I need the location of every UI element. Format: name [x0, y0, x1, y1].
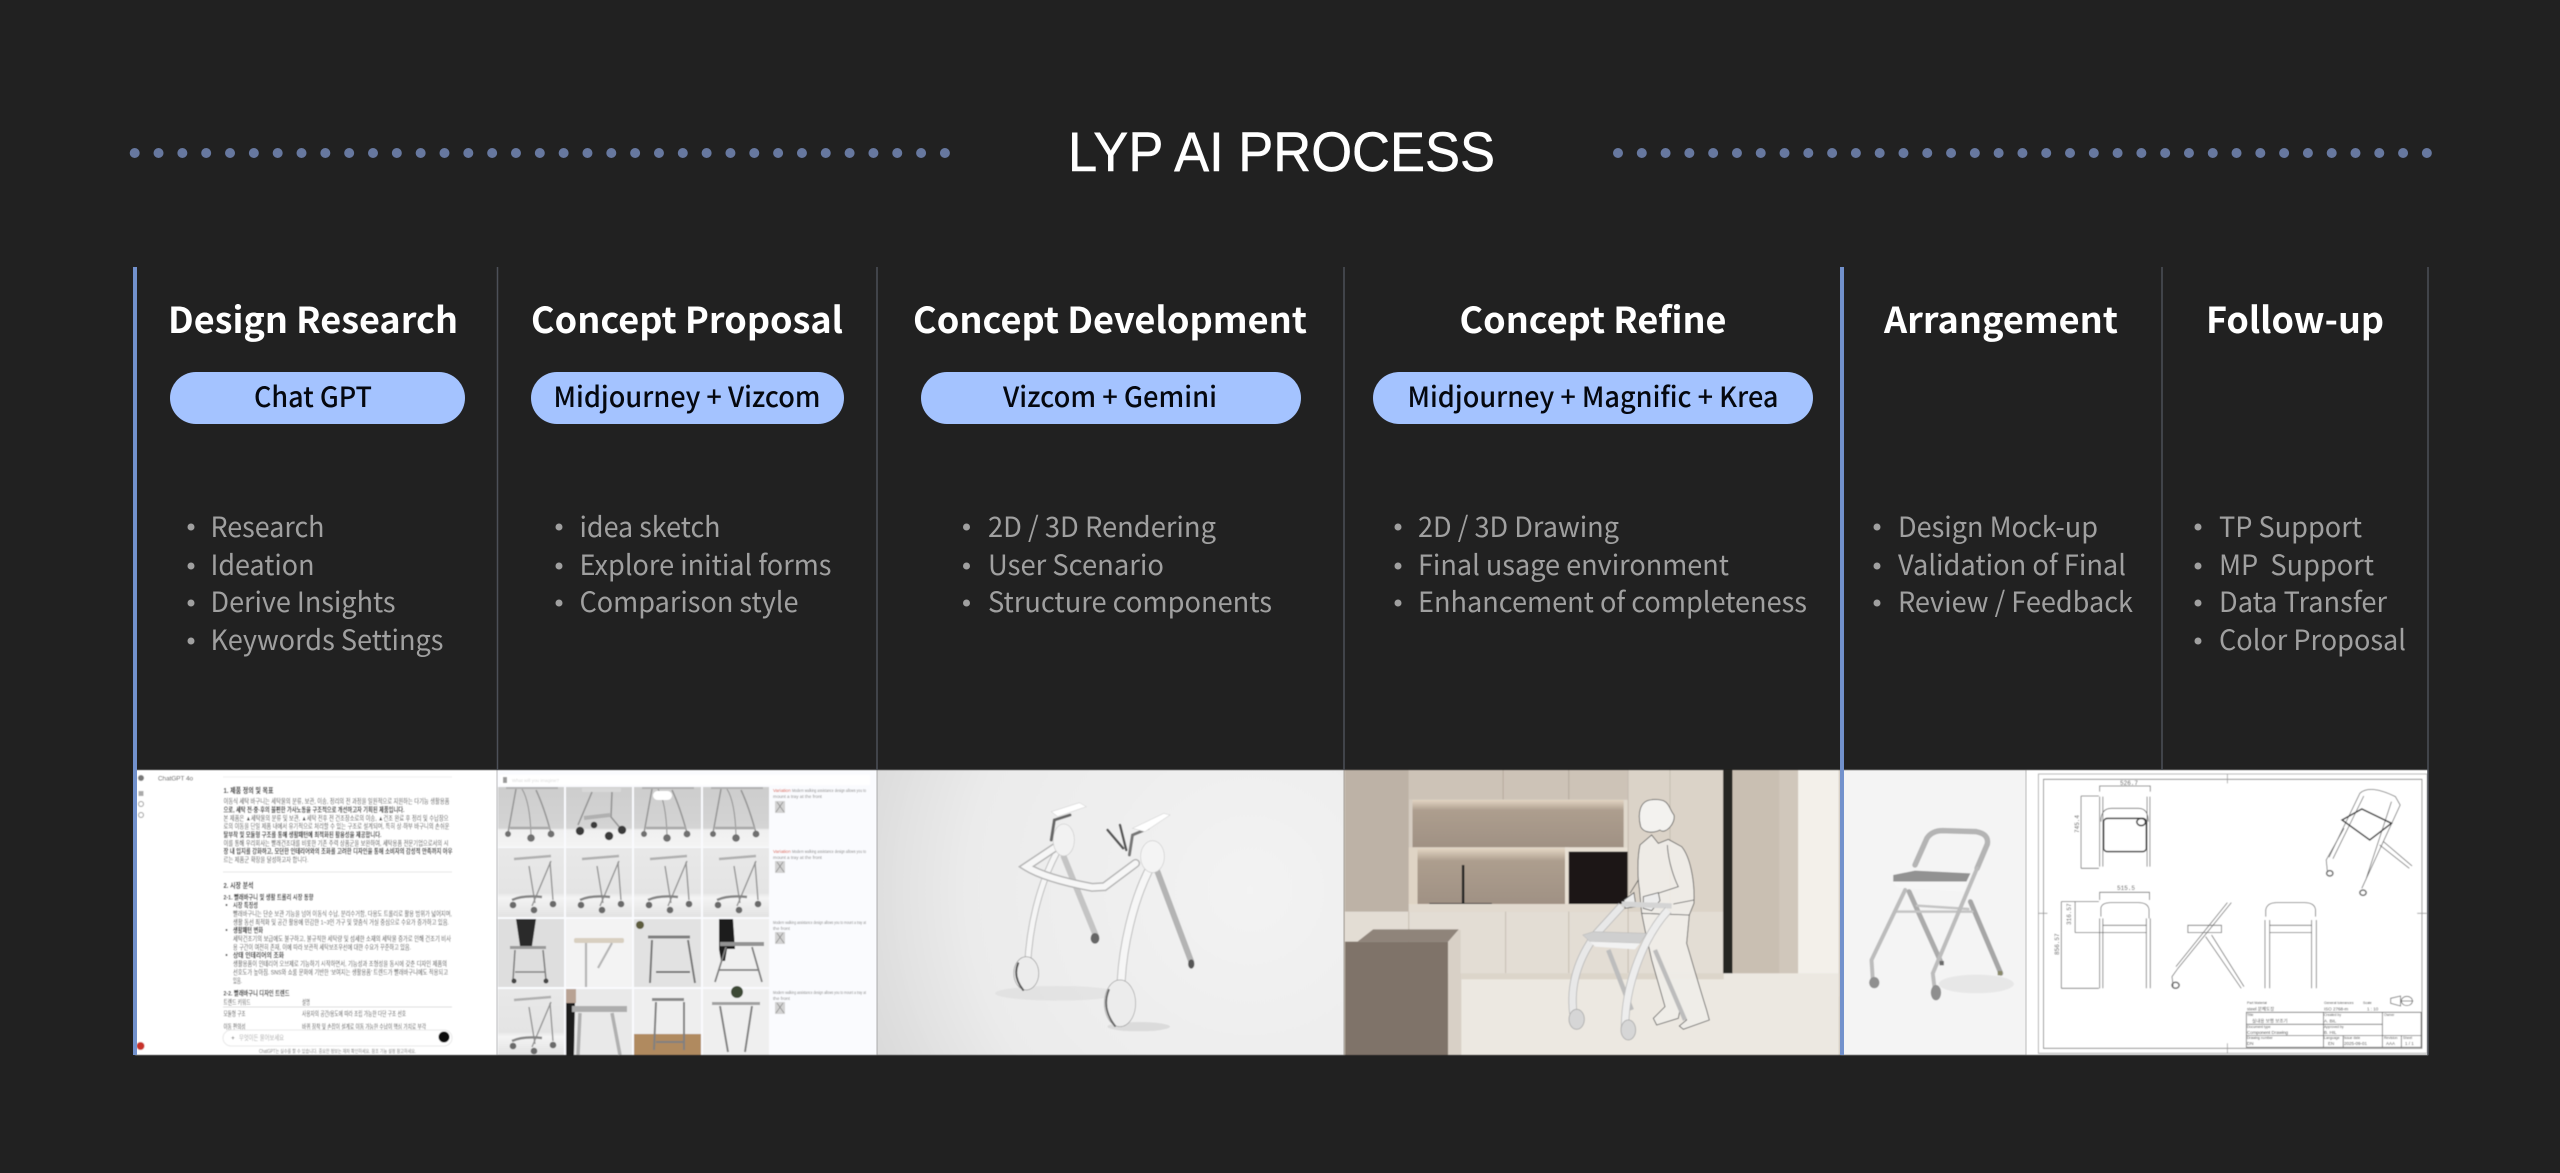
heading: Arrangement — [1883, 292, 2118, 344]
heading: Concept Development — [913, 292, 1307, 344]
panel: design research screenshot: ChatGPT는 실수를 할 수 있습니다. 중요한 정보는 재차 확인하세요. 참조 기능 설정 참고하세요. — [259, 1048, 416, 1055]
bullet list: 2D / 3D Drawing — [1418, 506, 1619, 546]
column: concept development — [913, 292, 1307, 621]
panel: design research screenshot: 있음. — [233, 977, 242, 985]
tool pill — [531, 372, 844, 424]
bullet list: Structure components — [988, 581, 1272, 621]
panel: design research screenshot: 으로, 세탁 전·중·후의 불편한 가사노동을 구조적으로 개선하고자 기획된 제품입니다. — [224, 805, 405, 814]
panel: follow-up technical drawing: Document type — [2247, 1025, 2271, 1029]
bullet list: MP Support — [2219, 544, 2374, 584]
bullet list — [963, 506, 1272, 621]
panel: design research screenshot: 생활용품이 인테리어 오브제로 기능하기 시작하면서, 기능성과 조형성을 동시에 갖춘 디자인 제품의 — [233, 959, 447, 968]
panel: design research screenshot: ChatGPT 4o — [158, 776, 193, 782]
bullet list: Explore initial forms — [580, 544, 832, 584]
panel: follow-up technical drawing: Scale — [2363, 1001, 2372, 1005]
panel: design research screenshot: 로의 이동을 단일 제품 내에서 유기적으로 처리할 수 있는 구조로 설계되며, 특히 상·하부 바구니의 손쉬운 — [224, 822, 450, 830]
column: concept proposal — [531, 292, 844, 621]
bullet list: TP Support — [2219, 506, 2362, 546]
panel: design research screenshot: 설명 — [302, 998, 310, 1006]
bullet list: Design Mock-up — [1898, 506, 2098, 546]
bullet list — [1394, 506, 1807, 621]
bullet list: Ideation — [210, 544, 314, 584]
panel: design research screenshot: 1. 제품 정의 및 목표 — [224, 785, 274, 795]
panel: follow-up technical drawing: Sheet — [2403, 1036, 2412, 1040]
bullet list: Validation of Final — [1898, 544, 2126, 584]
panel: concept proposal image grid — [497, 770, 877, 1055]
panel: follow-up technical drawing — [2026, 770, 2428, 1055]
panel: concept proposal image grid: Modern walking assistance design allows you to — [792, 788, 866, 793]
panel: design research screenshot: 이를 통해 우리회사는 빨래건조대를 비롯한 기존 주력 상품군을 보완하여, 세탁용품 전문기업으로서의 시 — [224, 838, 448, 848]
panel: follow-up technical drawing: Created by — [2324, 1013, 2341, 1017]
bullet list — [2194, 506, 2406, 659]
panel: follow-up technical drawing: steel 분체도장 — [2247, 1006, 2274, 1012]
bullet list: Derive Insights — [210, 581, 396, 621]
panel: design research screenshot: 상태 인테리어의 조화 — [233, 950, 284, 960]
tool pill: Chat GPT — [254, 376, 372, 416]
bullet list: Final usage environment — [1418, 544, 1729, 584]
heading: Concept Refine — [1460, 292, 1726, 344]
panel: design research screenshot: 모듈형 구조 — [224, 1010, 246, 1018]
panel: concept proposal image grid: the front — [773, 996, 791, 1001]
panel: design research screenshot: 바퀴 장착 및 손잡이 설계로 이동 가능한 수납이 핵심 가치로 부각 — [302, 1022, 426, 1031]
panel: design research screenshot: 르는 제품군 확장을 달성하고자 합니다. — [224, 855, 309, 864]
panel: concept proposal image grid: Modern walking assistance design allows you to mount a tray at — [773, 990, 867, 995]
panel: follow-up technical drawing: A. BIL — [2324, 1018, 2337, 1024]
panel: design research screenshot: 무엇이든 물어보세요 — [239, 1033, 284, 1042]
heading: Concept Proposal — [531, 292, 843, 344]
panel: design research screenshot: 선호도가 높아짐. SNS와 쇼룸 문화에 기반한 '보여지는 생활용품' 트렌드가 빨래바구니에도 적용되고 — [233, 968, 448, 976]
title: LYP AI PROCESS — [1068, 120, 1495, 183]
bullet list — [556, 506, 832, 621]
panel: design research screenshot: 생활패턴 변화 — [233, 926, 263, 934]
panel: design research screenshot: 2-1. 빨래바구니 및 생활 트롤리 시장 동향 — [224, 892, 314, 902]
bullet list — [188, 506, 444, 659]
bullet list: Color Proposal — [2219, 619, 2406, 659]
panel: follow-up technical drawing: 316.57 — [2066, 903, 2073, 925]
panel: design research screenshot: 용 구간이 여전히 존재, 이에 따라 보관적 세탁보조우선에 대한 수요가 꾸준하고 있음. — [233, 942, 411, 952]
panel: follow-up technical drawing: Drawing number — [2247, 1036, 2274, 1040]
panel: follow-up technical drawing: 526.7 — [2120, 780, 2138, 787]
panel: follow-up technical drawing: Approved by — [2324, 1025, 2344, 1029]
panel: follow-up technical drawing: ISO 2768-m — [2324, 1006, 2349, 1012]
panel: design research screenshot: 2. 시장 분석 — [224, 880, 254, 890]
heading: Design Research — [168, 292, 458, 344]
column: design research — [168, 292, 465, 659]
bullet list: User Scenario — [988, 544, 1164, 584]
panel: follow-up technical drawing: 1 / 1 — [2405, 1041, 2414, 1046]
panel: follow-up technical drawing: Part Material — [2247, 1001, 2267, 1005]
panel: arrangement mock-up — [1841, 770, 2026, 1055]
column: arrangement — [1874, 292, 2134, 621]
panel: design research screenshot: 탈부착 및 모듈형 구조를 통해 생활패턴에 최적화된 활용성을 제공합니다. — [224, 830, 382, 839]
panel: design research screenshot: + — [231, 1035, 235, 1042]
panel: design research screenshot: 세탁건조기의 보급에도 불구하고, 불규칙한 세탁량 및 섬세한 소재의 세탁물 증가로 인해 건조기 비사 — [233, 934, 451, 943]
bullet list: Enhancement of completeness — [1418, 581, 1807, 621]
panel: design research screenshot — [135, 770, 497, 1055]
bullet list: Review / Feedback — [1898, 581, 2134, 621]
panel: follow-up technical drawing: Revision — [2384, 1036, 2397, 1040]
dotted rule left — [135, 148, 946, 158]
bullet list — [1874, 506, 2134, 621]
panel: design research screenshot: 사용자의 공간/용도에 따라 조립 가능한 다단 구조 선호 — [302, 1009, 406, 1018]
bullet list: 2D / 3D Rendering — [988, 506, 1216, 546]
panel: follow-up technical drawing: DN — [2247, 1041, 2254, 1046]
bullet list: Research — [210, 506, 324, 546]
tool pill — [1373, 372, 1813, 424]
panel: design research screenshot: 빨래바구니는 단순 보관 기능을 넘어 이동식 수납, 분리수거함, 다용도 트롤리로 활용 범위가 넓어지며, — [233, 909, 452, 918]
panel: follow-up technical drawing: Title — [2247, 1013, 2254, 1017]
column dividers — [133, 267, 2428, 1055]
heading: Follow-up — [2206, 292, 2384, 344]
panel: follow-up technical drawing: 856.57 — [2054, 933, 2061, 955]
panel: design research screenshot: 이동 편의성 — [224, 1022, 246, 1031]
panel: design research screenshot: 이동식 세탁 바구니는 세탁물의 분류, 보관, 이송, 정리의 전 과정을 일원적으로 지원하는 다기능 생활용품 — [224, 796, 450, 806]
panel: follow-up technical drawing: 2025-09-01 — [2344, 1041, 2368, 1046]
panel: follow-up technical drawing: Issue date — [2344, 1036, 2360, 1040]
panel: follow-up technical drawing: Component Drawing — [2247, 1030, 2289, 1035]
tool pill — [170, 372, 465, 424]
panel: follow-up technical drawing: 515.5 — [2117, 885, 2135, 892]
panel: design research screenshot: 2-2. 빨래바구니 디자인 트렌드 — [224, 988, 290, 998]
panel: follow-up technical drawing: EN — [2328, 1041, 2334, 1046]
panel: follow-up technical drawing: B. HIL — [2324, 1030, 2337, 1035]
panel: follow-up technical drawing: 실내용 보행 보조기 — [2252, 1018, 2288, 1024]
panel: concept proposal image grid: mount a tray at the front — [773, 855, 822, 860]
tool pill: Midjourney + Magnific + Krea — [1408, 376, 1778, 416]
panel: design research screenshot: 트렌드 키워드 — [224, 998, 250, 1006]
bullet list: Comparison style — [580, 581, 798, 621]
bullet list: Data Transfer — [2219, 581, 2387, 621]
panel: design research screenshot: 본 제품은 ▲세탁물의 분류 및 보관, ▲세탁 전후 전 건조장소로의 이송, ▲건조 완료 후 정리 및 수납장으 — [224, 814, 448, 822]
panel: design research screenshot: 장 내 입지를 강화하고, 모던한 인테리어와의 조화를 고려한 디자인을 통해 소비자의 감성적 만족까지 아우 — [224, 846, 452, 856]
panel: follow-up technical drawing: 1 : 10 — [2367, 1006, 2379, 1012]
panel: follow-up technical drawing: Owner — [2384, 1013, 2395, 1017]
panel: concept proposal image grid: Modern walking assistance design allows you to — [792, 849, 866, 854]
panel: concept proposal image grid: Variation — [773, 849, 791, 854]
tool pill: Midjourney + Vizcom — [554, 376, 820, 416]
panel: follow-up technical drawing: AAA — [2386, 1041, 2395, 1046]
panel: concept proposal image grid: Modern walking assistance design allows you to mount a tray at — [773, 920, 867, 925]
panel: concept development render — [877, 770, 1344, 1055]
column: concept refine — [1373, 292, 1813, 621]
panel: design research screenshot: 생활 동선 최적화 및 공간 활용에 민감한 1~3인 가구 및 맞춤식 거실 중심으로 수요가 증가하고 있음. — [233, 918, 449, 926]
panel: concept refine kitchen scene — [1344, 770, 1841, 1055]
dotted rule right — [1618, 148, 2428, 158]
panel: design research screenshot: 시장 특징성 — [233, 900, 258, 910]
panel: concept proposal image grid: Variation — [773, 788, 791, 793]
tool pill — [921, 372, 1301, 424]
panel: concept proposal image grid: the front — [773, 926, 791, 931]
panel: concept proposal image grid: mount a tray at the front — [773, 794, 822, 799]
panel: follow-up technical drawing: Language — [2324, 1036, 2340, 1040]
bullet list: Keywords Settings — [210, 619, 444, 659]
column: follow-up — [2194, 292, 2406, 659]
panel: concept proposal image grid: What will you imagine? — [512, 778, 559, 783]
panel: follow-up technical drawing: 745.4 — [2074, 815, 2081, 833]
panel: follow-up technical drawing: General tolerances — [2324, 1001, 2354, 1005]
bullet list: idea sketch — [580, 506, 720, 546]
tool pill: Vizcom + Gemini — [1002, 376, 1217, 416]
